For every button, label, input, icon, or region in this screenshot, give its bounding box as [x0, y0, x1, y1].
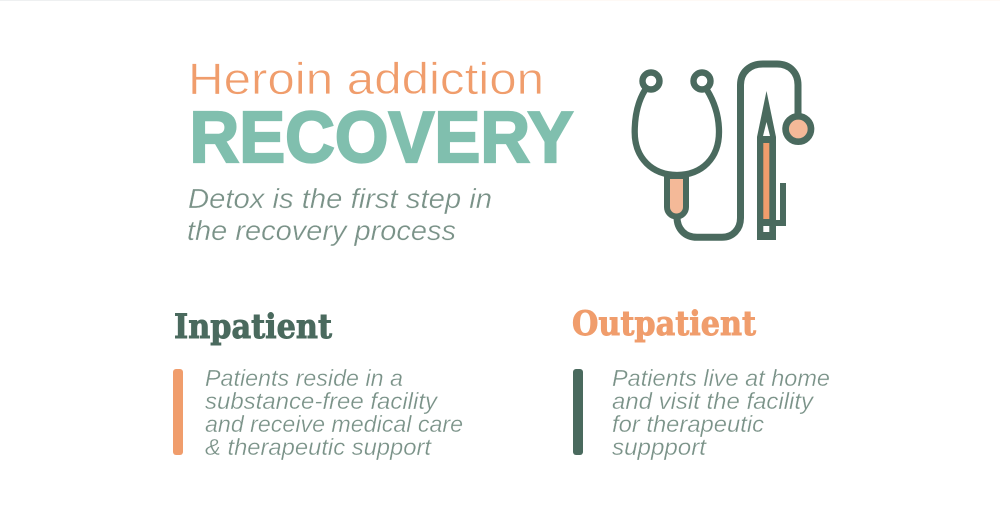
text block: for therapeutic — [612, 411, 765, 437]
text block: and visit the facility — [612, 388, 815, 414]
title: Heroin addiction: Heroin addiction — [188, 55, 544, 104]
subtitle: the recovery process — [187, 215, 456, 246]
icon: stethoscope head tube — [635, 72, 719, 175]
text block: suppport — [612, 434, 708, 460]
icon: pencil — [757, 91, 783, 240]
text block: Patients live at home — [612, 365, 830, 391]
text block: Patients reside in a — [205, 365, 403, 391]
icon: chest piece — [786, 116, 811, 142]
panel: inpatient — [173, 307, 463, 460]
text block: & therapeutic support — [205, 434, 433, 460]
accent bar — [173, 369, 183, 455]
heading: Outpatient: Outpatient — [572, 304, 756, 344]
heading: Inpatient: Inpatient — [174, 307, 332, 347]
text block — [205, 365, 463, 460]
title: RECOVERY: RECOVERY — [190, 98, 574, 178]
text block — [612, 365, 830, 460]
icon: stethoscope stem — [667, 176, 686, 216]
subtitle: Detox is the first step in — [188, 183, 492, 214]
subtitle — [187, 183, 492, 246]
icon: stethoscope and pencil — [635, 64, 811, 240]
icon: stethoscope long tube — [677, 64, 798, 237]
header block — [187, 55, 574, 246]
text block: substance-free facility — [205, 388, 439, 414]
accent bar — [573, 369, 583, 455]
text block: and receive medical care — [205, 411, 463, 437]
panel: outpatient — [572, 304, 830, 460]
